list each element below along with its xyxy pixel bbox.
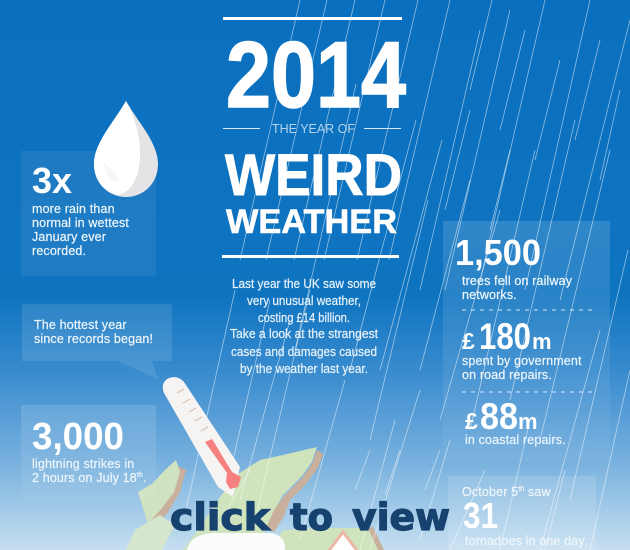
intro text: Take a look at the strangest	[230, 326, 378, 341]
text: road repairs statistic: £	[462, 328, 475, 354]
intro text: very unusual weather,	[247, 293, 361, 308]
title block	[222, 17, 406, 258]
title: weird: WEIRD	[225, 143, 402, 208]
text: 3x statistic: normal in wettest	[32, 216, 129, 230]
text: coastal repairs statistic: m	[518, 409, 538, 434]
text: coastal repairs statistic	[465, 396, 566, 447]
panel: tornadoes background	[448, 476, 596, 550]
text: lightning statistic	[32, 416, 147, 485]
title: weather: WEATHER	[226, 203, 397, 241]
panel: rain statistic background	[21, 151, 156, 276]
icon: thermometer	[163, 377, 241, 497]
text: tornadoes statistic: saw	[524, 485, 552, 499]
text: trees statistic	[455, 232, 573, 302]
text: lightning statistic: 2 hours on July 18	[32, 471, 137, 485]
subtitle: the year of: THE YEAR OF	[272, 121, 355, 136]
text: road repairs statistic	[462, 316, 582, 382]
text: hottest year	[34, 318, 153, 346]
text: road repairs statistic: 180	[479, 316, 531, 357]
map of Scotland	[126, 447, 384, 550]
text: tornadoes statistic: tornadoes in one day.	[465, 534, 587, 548]
text: trees statistic: networks.	[462, 288, 517, 302]
text: coastal repairs statistic: 88	[480, 396, 518, 437]
panel: damages background	[443, 221, 610, 461]
click to view overlay: click	[170, 496, 271, 539]
text: tornadoes statistic	[462, 485, 587, 548]
intro text: cases and damages caused	[231, 344, 377, 359]
text: trees statistic: trees fell on railway	[462, 274, 573, 288]
intro text	[230, 276, 378, 376]
text: road repairs statistic: m	[532, 329, 552, 354]
icon: water drop	[94, 101, 158, 197]
panel: hottest year speech bubble	[22, 304, 172, 379]
southern coast band	[368, 527, 384, 550]
text: 3x statistic	[32, 160, 129, 258]
text: coastal repairs statistic: in coastal repairs.	[465, 433, 566, 447]
text: hottest year: since records began!	[34, 332, 153, 346]
text: tornadoes statistic: 31	[463, 495, 498, 536]
text: road repairs statistic: spent by government	[462, 354, 582, 368]
title: 2014: 2014	[226, 22, 406, 127]
mainland	[183, 447, 317, 550]
text: lightning statistic: th	[137, 472, 143, 479]
text: lightning statistic: .	[143, 471, 147, 485]
island: west coast land	[138, 460, 180, 524]
text: tornadoes statistic: th	[518, 486, 524, 493]
mainland coast band	[266, 450, 323, 532]
text: 3x statistic: 3x	[32, 160, 72, 201]
click to view overlay	[170, 496, 450, 539]
lower western isles	[126, 515, 175, 550]
text: 3x statistic: recorded.	[32, 244, 86, 258]
intro text: Last year the UK saw some	[232, 276, 376, 291]
text: lightning statistic: 3,000	[32, 416, 124, 458]
panel: lightning background	[21, 405, 156, 500]
island: west coast coast band	[146, 466, 186, 530]
text: hottest year: The hottest year	[34, 318, 127, 332]
rain streaks	[186, 0, 630, 550]
click to view overlay: view	[352, 496, 450, 539]
text: coastal repairs statistic: £	[465, 408, 478, 434]
text: 3x statistic: more rain than	[32, 202, 115, 216]
text: lightning statistic: lightning strikes in	[32, 457, 134, 471]
warning triangle	[325, 532, 361, 550]
text: trees statistic: 1,500	[455, 232, 541, 273]
cloud	[187, 533, 285, 550]
intro text: by the weather last year.	[240, 361, 368, 376]
text: 3x statistic: January ever	[32, 230, 106, 244]
click to view overlay: to	[290, 496, 333, 539]
text: tornadoes statistic: October 5	[462, 485, 518, 499]
text: road repairs statistic: on road repairs.	[462, 368, 552, 382]
intro text: costing £14 billion.	[258, 310, 350, 325]
southern land	[270, 528, 380, 550]
